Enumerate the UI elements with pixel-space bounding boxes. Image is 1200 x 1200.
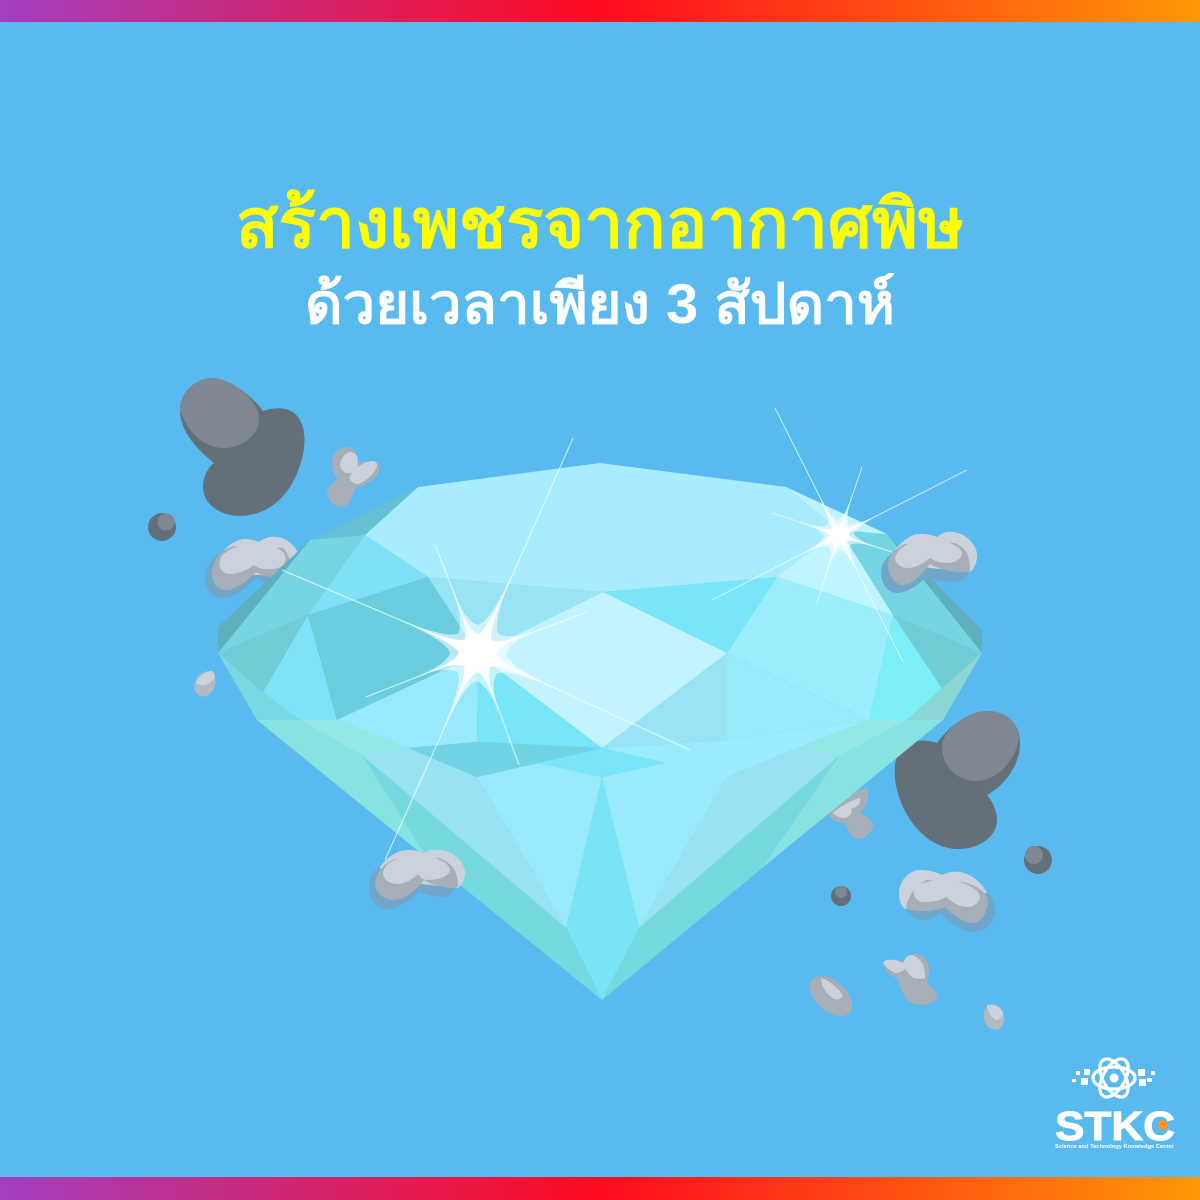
gray pebble, lower centre right — [802, 968, 860, 1024]
gray rock, upper left small — [327, 447, 379, 507]
large dark rock, upper left — [180, 378, 304, 516]
gray rock cluster, lower left of diamond — [369, 850, 465, 909]
logo wordmark: STKC — [1055, 1103, 1175, 1149]
diamond crown facets — [218, 463, 982, 748]
gray rock, behind lower right of diamond — [828, 788, 873, 839]
top gradient bar — [0, 0, 1200, 22]
subtitle: ด้วยเวลาเพียง 3 สัปดาห์ — [305, 272, 895, 335]
diamond — [218, 463, 982, 1000]
bottom gradient bar — [0, 1177, 1200, 1200]
gray rock cluster, left of diamond — [205, 537, 298, 598]
large dark rock, lower right — [895, 711, 1020, 849]
logo tagline: Science and Technology Knowledge Center — [1055, 1144, 1175, 1150]
title: สร้างเพชรจากอากาศพิษ — [236, 186, 964, 262]
gray rock cluster, right — [899, 870, 995, 932]
gray pebble, bottom right — [981, 1002, 1007, 1032]
gray rock, lower right — [883, 954, 937, 1005]
dark pebble, lower centre — [831, 886, 851, 906]
diamond pavilion facets — [257, 653, 982, 1000]
dark pebble, right — [1024, 846, 1052, 874]
gray rock cluster, upper right of diamond — [881, 532, 977, 593]
gray pebble, left — [190, 668, 220, 700]
logo atom icon — [1093, 1054, 1135, 1102]
small sparkle — [712, 408, 967, 662]
rocks in front of the diamond — [148, 447, 1052, 1032]
logo pixel dots — [1072, 1069, 1155, 1086]
dark pebble, left — [148, 513, 176, 541]
STKC logo — [1055, 1054, 1175, 1150]
large sparkle — [282, 438, 690, 860]
rocks behind the diamond — [180, 378, 1020, 849]
logo orange dot — [1158, 1120, 1168, 1130]
